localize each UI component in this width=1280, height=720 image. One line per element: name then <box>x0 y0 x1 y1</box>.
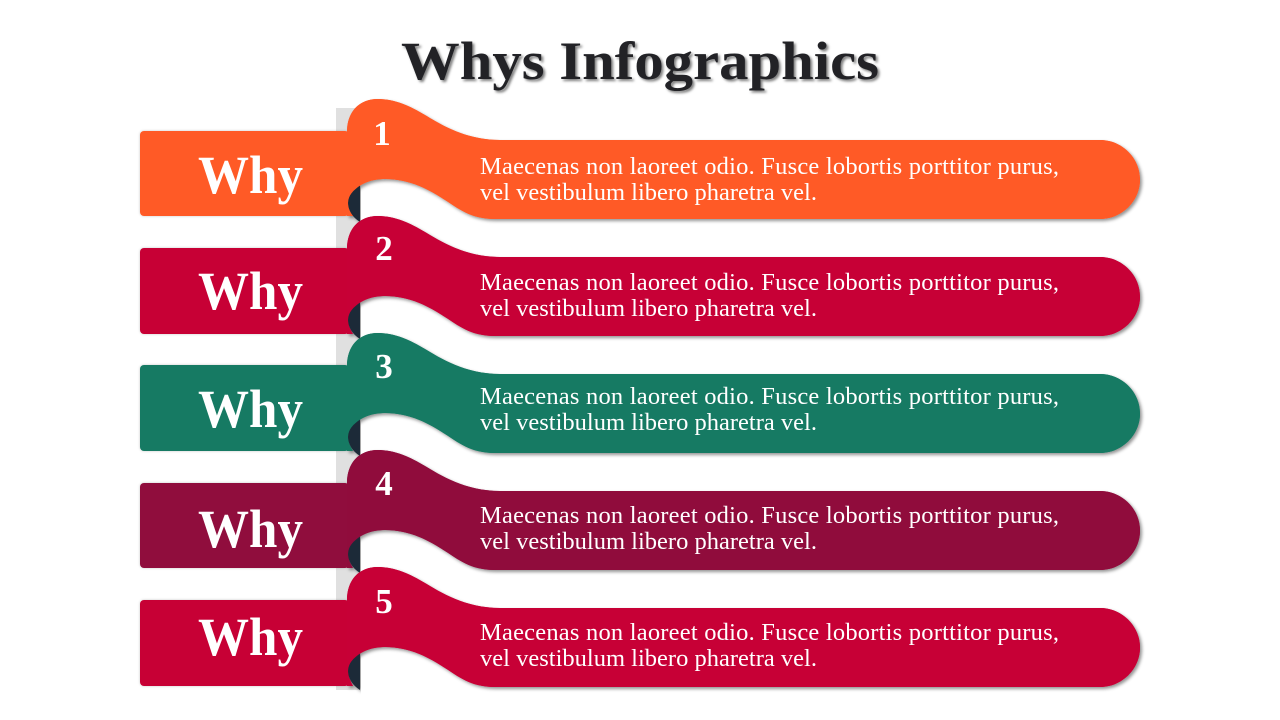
row 4 tab <box>140 483 349 568</box>
row 2 curl <box>348 301 360 339</box>
row 2 ribbon shadow <box>347 216 1140 336</box>
row 3 <box>140 333 1140 456</box>
row 1 why label: Why <box>198 145 303 205</box>
row 2 body text: Maecenas non laoreet odio. Fusce lobortis porttitor purus, <box>480 269 1059 296</box>
row 4 number: 4 <box>375 464 393 503</box>
row 4 ribbon shadow <box>347 450 1140 570</box>
row 4 body text: Maecenas non laoreet odio. Fusce lobortis porttitor purus, <box>480 502 1059 529</box>
row 5 ribbon shadow <box>347 567 1140 687</box>
row 4 curl <box>348 535 360 573</box>
row 5 <box>140 567 1140 690</box>
row 3 number: 3 <box>375 347 393 386</box>
row 2 number: 2 <box>375 229 393 268</box>
row 2 why label: Why <box>198 261 303 321</box>
row 1 tab <box>140 131 349 216</box>
row 2 <box>140 216 1140 339</box>
row 5 number: 5 <box>375 582 393 621</box>
row 5 body text: vel vestibulum libero pharetra vel. <box>480 645 817 672</box>
row 5 ribbon <box>347 567 1140 687</box>
row 1 body text: Maecenas non laoreet odio. Fusce lobortis porttitor purus, <box>480 153 1059 180</box>
row 5 why label: Why <box>198 607 303 667</box>
row 4 body text: vel vestibulum libero pharetra vel. <box>480 528 817 555</box>
row 5 curl <box>348 652 360 690</box>
row 1 ribbon <box>347 99 1140 219</box>
row 1 ribbon shadow <box>347 99 1140 219</box>
row 4 ribbon <box>347 450 1140 570</box>
row 3 body text <box>480 383 1059 436</box>
row 3 body text: vel vestibulum libero pharetra vel. <box>480 409 817 436</box>
row 1 body text <box>480 153 1059 206</box>
row 5 tab <box>140 600 349 686</box>
title: Whys Infographics <box>401 31 879 91</box>
row 1 <box>140 99 1140 222</box>
row 3 tab <box>140 365 349 451</box>
background strip <box>336 108 360 690</box>
row 3 why label: Why <box>198 379 303 439</box>
row 2 ribbon <box>347 216 1140 336</box>
row 5 body text <box>480 619 1059 672</box>
row 3 body text: Maecenas non laoreet odio. Fusce lobortis porttitor purus, <box>480 383 1059 410</box>
row 2 body text <box>480 269 1059 322</box>
row 3 curl <box>348 418 360 456</box>
row 1 number: 1 <box>373 114 391 153</box>
row 5 body text: Maecenas non laoreet odio. Fusce lobortis porttitor purus, <box>480 619 1059 646</box>
row 1 curl <box>348 184 360 222</box>
row 4 why label: Why <box>198 499 303 559</box>
row 3 ribbon <box>347 333 1140 453</box>
row 4 body text <box>480 502 1059 555</box>
row 2 body text: vel vestibulum libero pharetra vel. <box>480 295 817 322</box>
row 3 ribbon shadow <box>347 333 1140 453</box>
row 4 <box>140 450 1140 573</box>
row 1 body text: vel vestibulum libero pharetra vel. <box>480 179 817 206</box>
row 2 tab <box>140 248 349 334</box>
